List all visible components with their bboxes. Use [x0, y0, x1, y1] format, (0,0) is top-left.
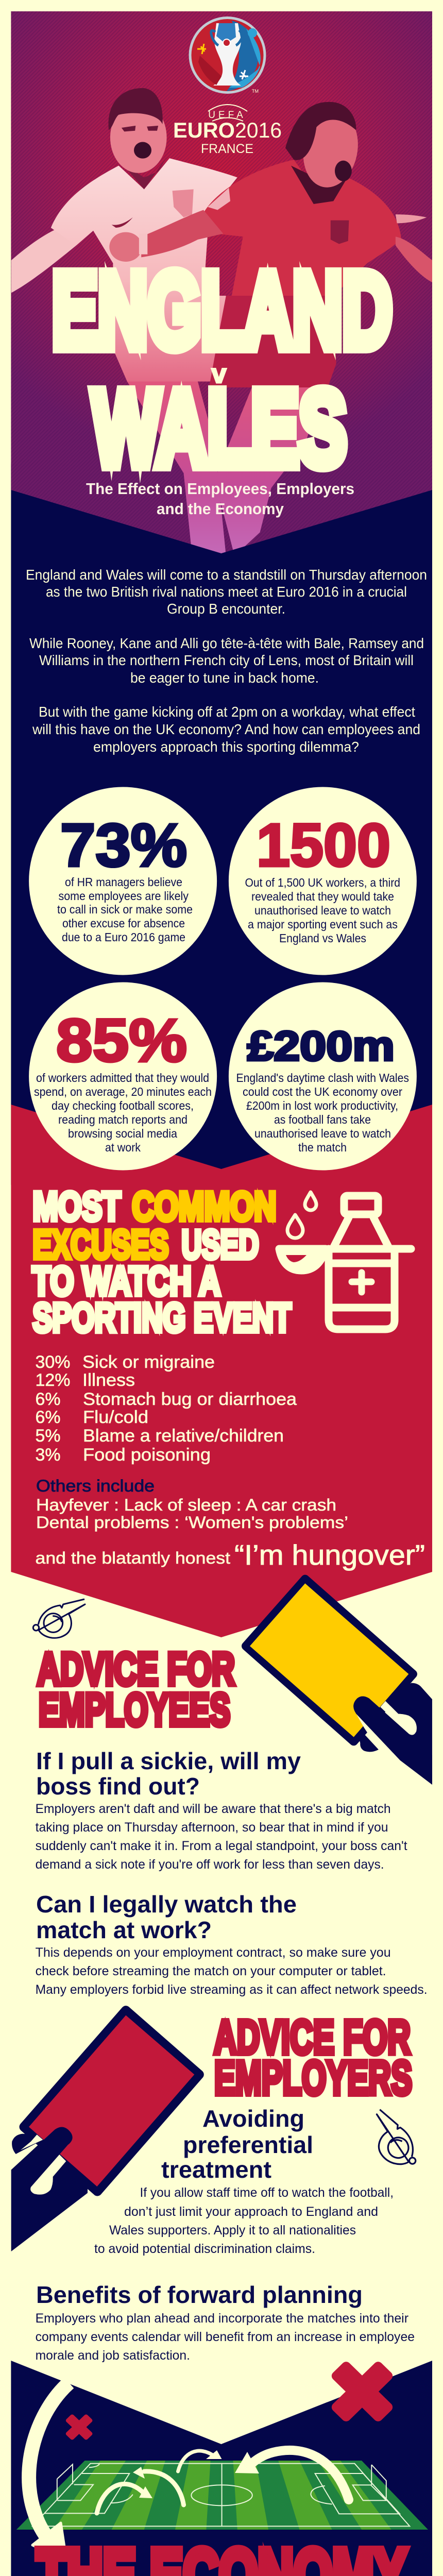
stat circle: 1500: unauthorised leave to watch [254, 904, 391, 917]
list: excuses percentages: 3% [35, 1445, 61, 1465]
text block: avoiding preferential treatment: don’t just limit your approach to England and [124, 2205, 378, 2219]
stat circle: 85%: 85% [56, 1007, 187, 1075]
heading: most common excuses: COMMON [132, 1183, 276, 1229]
list: excuses percentages: Stomach bug or diarrhoea [83, 1389, 297, 1409]
heading: most common excuses: SPORTING EVENT [33, 1294, 292, 1341]
logo: UEFA Euro 2016 France: FRANCE [201, 142, 253, 156]
logo: UEFA Euro 2016 France: UEFA [208, 110, 246, 121]
text block: other excuses: Hayfever : Lack of sleep : A car crash [36, 1496, 336, 1514]
heading: advice for employers [214, 2010, 412, 2105]
text block: introduction: employers approach this sporting dilemma? [93, 739, 359, 755]
stat circle: 85%: at work [105, 1141, 141, 1154]
stat circle: 1500: a major sporting event such as [248, 918, 398, 931]
stat circle: £200m: £200m in lost work productivity, [246, 1099, 398, 1112]
stat circle: 73%: due to a Euro 2016 game [62, 930, 185, 944]
stat circle: 85%: spend, on average, 20 minutes each [34, 1085, 212, 1098]
arrow: pitch pass middle [133, 2467, 183, 2505]
list: excuses percentages: 6% [35, 1389, 61, 1409]
logo: UEFA Euro 2016 France: 2016 [235, 118, 282, 142]
heading: most common excuses: EXCUSES [33, 1221, 169, 1267]
text block: pull a sickie: Employers aren't daft and will be aware that there's a big match [36, 1802, 391, 1816]
text block: pull a sickie: suddenly can't make it in. From a legal standpoint, your boss can't [36, 1839, 407, 1853]
arrow: pitch pass low [97, 2484, 152, 2513]
text block: introduction: as the two British rival nations meet at Euro 2016 in a crucial [46, 584, 407, 600]
list: excuses percentages: Blame a relative/children [83, 1426, 284, 1446]
heading: most common excuses: MOST [33, 1183, 121, 1229]
text block: avoiding preferential treatment [94, 2105, 394, 2256]
heading: most common excuses: TO WATCH A [32, 1258, 220, 1303]
text block: avoiding preferential treatment: to avoid potential discrimination claims. [94, 2242, 315, 2256]
icon: UEFA Euro 2016 trophy badge [189, 16, 266, 94]
list: excuses percentages: Flu/cold [83, 1408, 148, 1427]
list: excuses percentages: 30% [35, 1352, 70, 1372]
stat circle: 85%: day checking football scores, [52, 1099, 194, 1112]
panel: navy economy background [11, 2361, 432, 2576]
text block: benefits of forward planning: company events calendar will benefit from an increase in employee [36, 2330, 415, 2344]
text block: other excuses: and the blatantly honest [35, 1549, 230, 1567]
subtitle [86, 480, 354, 518]
heading: advice for employees [37, 1643, 235, 1735]
stat circle: £200m: could cost the UK economy over [243, 1085, 402, 1098]
text block: introduction: Group B encounter. [167, 601, 285, 617]
stat circle: £200m [229, 982, 417, 1171]
stat circle: 85% [29, 982, 217, 1171]
stat circle: 73%: some employees are likely [59, 889, 189, 903]
text block: introduction: Williams in the northern French city of Lens, most of Britain will [39, 652, 414, 668]
text block: avoiding preferential treatment: preferential [183, 2131, 313, 2158]
text block: introduction [26, 567, 427, 755]
text block: benefits of forward planning: morale and job satisfaction. [36, 2348, 190, 2363]
stat circle: 73%: other excuse for absence [62, 917, 185, 930]
stat circle: £200m: £200m [247, 1023, 395, 1070]
text block: benefits of forward planning [36, 2281, 415, 2363]
text block: pull a sickie: If I pull a sickie, will my [36, 1748, 301, 1774]
stat circle: 1500: Out of 1,500 UK workers, a third [245, 876, 400, 889]
text block: introduction: But with the game kicking off at 2pm on a workday, what effect [39, 704, 415, 720]
text block: watch the match at work: This depends on your employment contract, so make sure you [36, 1945, 391, 1960]
illustration: football pitch [16, 2461, 428, 2530]
heading: most common excuses [32, 1183, 292, 1341]
title: England v Wales [52, 251, 392, 488]
stat circle: 1500: 1500 [257, 811, 390, 879]
text block: watch the match at work: match at work? [36, 1917, 212, 1943]
icon: whistle right [360, 2109, 429, 2172]
title: England v Wales: v [212, 359, 227, 389]
text block: avoiding preferential treatment: Avoiding [202, 2105, 304, 2132]
icon: small cross on pitch [65, 2414, 93, 2441]
stat circle: 73%: 73% [60, 811, 187, 879]
text block: avoiding preferential treatment: Wales supporters. Apply it to all nationalities [109, 2223, 356, 2238]
stat circle: 73%: of HR managers believe [65, 875, 182, 889]
stat circle: £200m: England's daytime clash with Wales [236, 1071, 409, 1084]
list: excuses percentages: Food poisoning [83, 1445, 211, 1465]
icon: whistle left [33, 1599, 85, 1638]
text block: watch the match at work: Can I legally watch the [36, 1891, 297, 1918]
list: excuses percentages: 12% [35, 1370, 70, 1390]
stat circle: 85%: browsing social media [68, 1127, 178, 1140]
heading: advice for employees: EMPLOYEES [39, 1684, 230, 1735]
text block: pull a sickie: boss find out? [36, 1773, 200, 1800]
panel: hero with players [11, 11, 432, 557]
text block: watch the match at work: check before streaming the match on your computer or tablet. [36, 1964, 386, 1978]
stat circle: 85%: reading match reports and [58, 1113, 188, 1126]
subtitle: and the Economy [157, 500, 284, 518]
text block: other excuses: “I’m hungover” [234, 1539, 425, 1571]
trademark: TM [252, 89, 259, 94]
text block: pull a sickie: taking place on Thursday afternoon, so bear that in mind if you [36, 1820, 388, 1835]
stat circle: 85%: of workers admitted that they would [36, 1071, 209, 1084]
text block: introduction: England and Wales will come to a standstill on Thursday afternoon [26, 567, 427, 583]
arrow: pitch pass right [235, 2450, 349, 2500]
stat circle: 1500: England vs Wales [279, 931, 366, 945]
text block: other excuses: Dental problems : ‘Women's problems’ [36, 1513, 348, 1532]
subtitle: The Effect on Employees, Employers [86, 480, 354, 498]
list: excuses percentages: 5% [35, 1426, 61, 1446]
icon: medicine bottle and spoon [279, 1192, 411, 1329]
heading: advice for employees: ADVICE FOR [37, 1643, 235, 1694]
panel: navy intro and statistics background [11, 464, 432, 1185]
text block: watch the match at work [36, 1891, 428, 1997]
text block: other excuses [35, 1477, 425, 1571]
list: excuses percentages: Sick or migraine [82, 1352, 215, 1372]
arrow: pitch pass top [178, 2450, 222, 2471]
text block: pull a sickie [36, 1748, 407, 1872]
icon: large cross [330, 2360, 395, 2424]
panel: red excuses background [11, 1105, 432, 1637]
text block: other excuses: Others include [36, 1477, 155, 1495]
stat circle: £200m: unauthorised leave to watch [254, 1127, 391, 1140]
heading: most common excuses: USED [181, 1221, 259, 1267]
text block: introduction: While Rooney, Kane and Alli go tête-à-tête with Bale, Ramsey and [29, 635, 424, 651]
list: excuses percentages: Illness [82, 1370, 135, 1390]
stat circle: 1500 [229, 787, 417, 975]
text block: introduction: be eager to tune in back home. [130, 670, 319, 686]
text block: avoiding preferential treatment: If you allow staff time off to watch the football, [140, 2185, 394, 2200]
stat circle: 1500: revealed that they would take [251, 890, 394, 903]
stat circle: £200m: as football fans take [274, 1113, 371, 1126]
stat circle: 73% [29, 787, 217, 975]
logo: UEFA Euro 2016 France: EURO [173, 118, 235, 142]
text block: watch the match at work: Many employers forbid live streaming as it can affect network speeds. [36, 1982, 428, 1997]
text block: benefits of forward planning: Employers who plan ahead and incorporate the matches into their [36, 2311, 408, 2326]
list: excuses percentages: 6% [35, 1408, 61, 1427]
list: excuses percentages [35, 1352, 297, 1465]
icon: hand holding red card [11, 2010, 199, 2251]
text block: benefits of forward planning: Benefits of forward planning [36, 2281, 363, 2308]
text block: introduction: will this have on the UK economy? And how can employees and [32, 721, 420, 737]
arrow: large curved white arrow [29, 2383, 69, 2561]
illustration: Rooney and Bale celebrating [11, 88, 432, 556]
logo: UEFA Euro 2016 France [173, 105, 282, 156]
text block: avoiding preferential treatment: treatment [161, 2156, 271, 2183]
text block: pull a sickie: demand a sick note if you're off work for less than seven days. [36, 1857, 384, 1872]
stat circle: £200m: the match [298, 1141, 347, 1154]
icon: hand holding yellow card [246, 1579, 432, 1785]
stat circle: 73%: to call in sick or make some [57, 903, 193, 916]
